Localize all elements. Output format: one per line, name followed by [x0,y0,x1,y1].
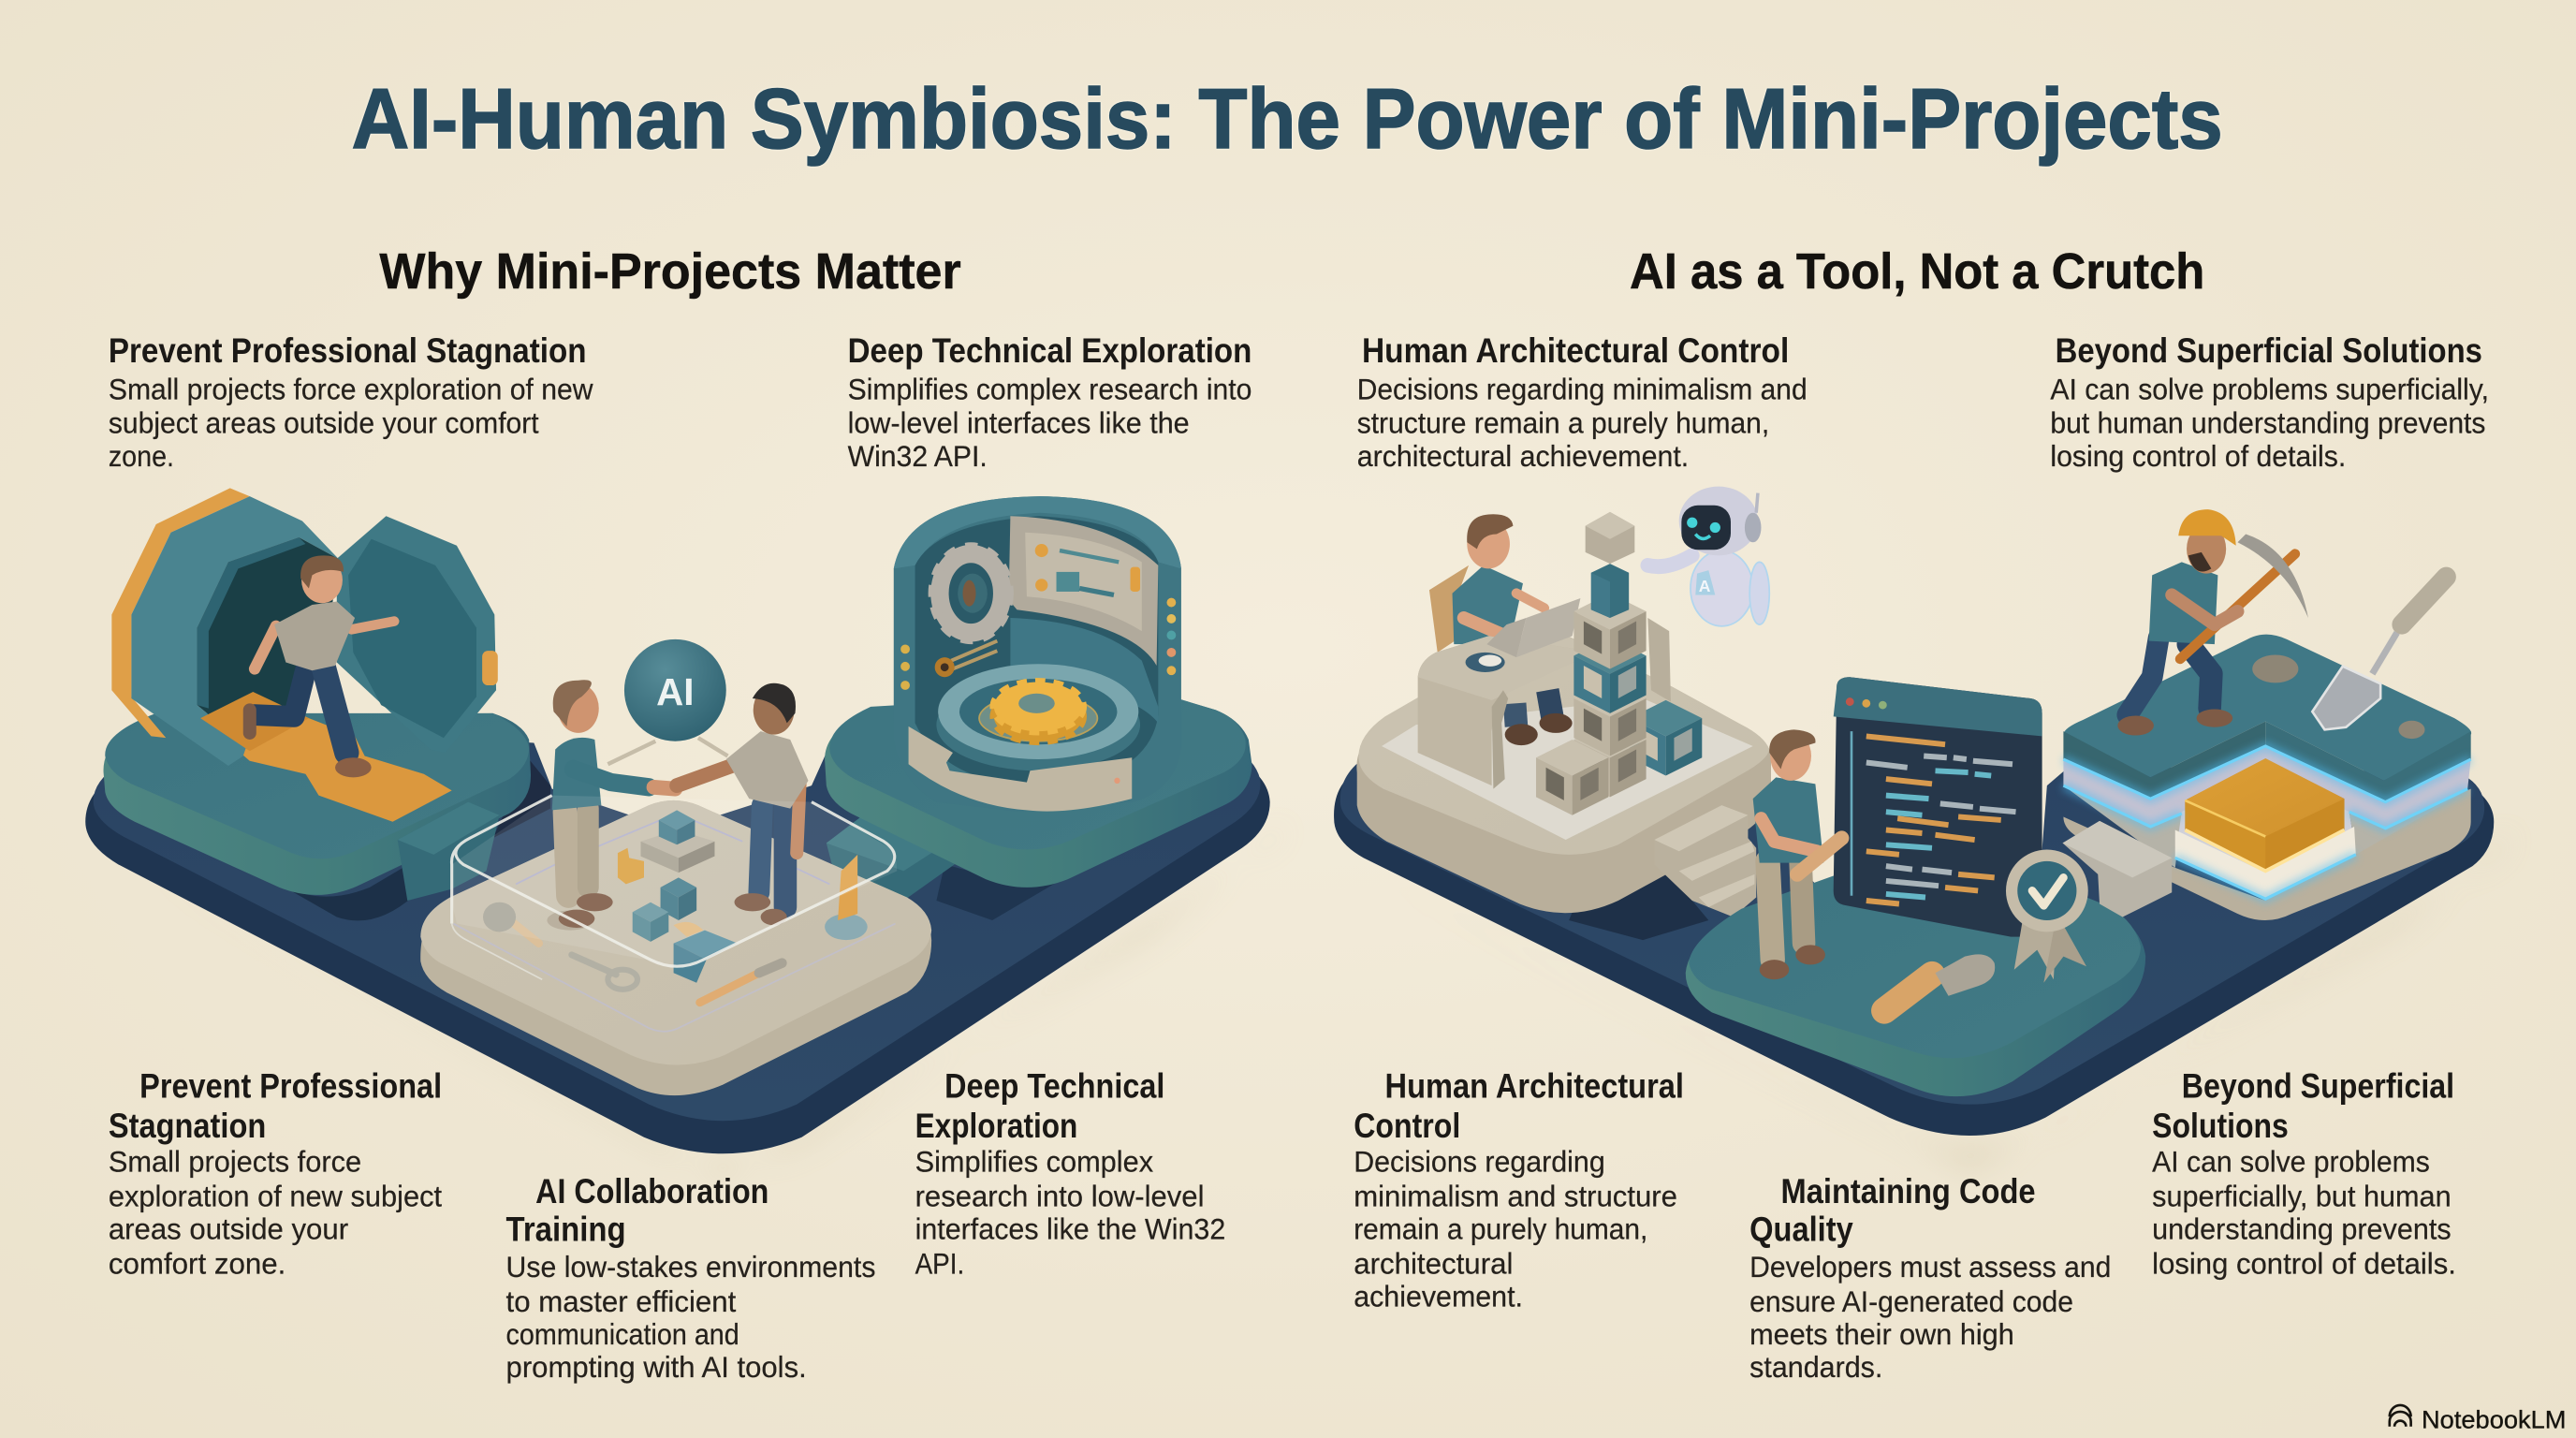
text block: deep technical exploration top: Deep Technical Exploration [848,331,1251,370]
text block: deep technical exploration top: low-level interfaces like the [848,406,1190,439]
text block: prevent professional stagnation bottom: Prevent Professional [139,1067,442,1106]
panel: beige workshop platform [420,800,931,1095]
text block: prevent professional stagnation top: Small projects force exploration of new [109,374,593,406]
text block: deep technical exploration bottom: interfaces like the Win32 [915,1213,1225,1246]
icon: ai robot: A [1699,577,1711,595]
figure: right person shaking hands [677,683,809,925]
text block: prevent professional stagnation bottom [109,1067,442,1280]
stone step [2063,821,2172,917]
text block: beyond superficial solutions top: Beyond Superficial Solutions [2056,331,2482,370]
text block: ai collaboration training [506,1172,875,1384]
navy base [1334,716,2494,1136]
text block: beyond superficial solutions top: losing control of details. [2050,440,2346,473]
title: AI-Human Symbiosis: The Power of Mini-Projects [352,71,2223,167]
figure: ai sphere [607,639,728,764]
teal block: left [104,713,531,895]
text block: ai collaboration training: Use low-stakes environments [506,1251,875,1284]
icon: desk with person [1418,514,1671,789]
text block: prevent professional stagnation bottom: Stagnation [109,1107,266,1145]
text block: maintaining code quality: meets their own high [1749,1318,2014,1351]
platform shadow [131,822,1290,1177]
navy base [85,720,1270,1153]
text block: prevent professional stagnation bottom: exploration of new subject [109,1180,442,1212]
text block: prevent professional stagnation bottom: areas outside your [109,1213,348,1246]
text block: maintaining code quality: Developers must assess and [1749,1251,2111,1284]
text block: prevent professional stagnation top [109,331,593,473]
text block: beyond superficial solutions top [2050,331,2489,473]
teal block: right [825,690,1251,888]
text block: ai collaboration training: to master efficient [506,1285,737,1318]
text block: human architectural control bottom: remain a purely human, [1354,1213,1647,1246]
text block: prevent professional stagnation top: Prevent Professional Stagnation [109,331,587,370]
text block: human architectural control top: structure remain a purely human, [1357,406,1769,439]
figure: developer [1753,729,1841,979]
stone block: left [1356,624,1771,913]
heading: ai as a tool: AI as a Tool, Not a Crutch [1630,244,2204,300]
text block: ai collaboration training: AI Collaboration [535,1172,768,1211]
text block: maintaining code quality: Quality [1749,1210,1853,1248]
figure: person walking through door [250,555,394,777]
platform shadow [1347,829,2513,1170]
text block: deep technical exploration bottom: Deep Technical [944,1067,1164,1106]
icon: block tower [1536,512,1702,815]
icon: technical chamber [894,496,1181,812]
text block: prevent professional stagnation bottom: comfort zone. [109,1247,285,1280]
icon: stone stairs [1654,805,1756,917]
text block: prevent professional stagnation top: subject areas outside your comfort [109,406,539,439]
text block: deep technical exploration top: Win32 API. [848,440,988,473]
text block: human architectural control bottom: Control [1354,1107,1460,1145]
chart: code screen [1834,677,2042,937]
panel: left isometric platform [85,488,1290,1177]
text block: prevent professional stagnation bottom: Small projects force [109,1146,361,1179]
text block: deep technical exploration bottom: Simplifies complex [915,1146,1153,1179]
text block: beyond superficial solutions bottom: losing control of details. [2152,1247,2456,1280]
text block: human architectural control bottom: architectural [1354,1247,1513,1280]
text block: maintaining code quality: standards. [1749,1351,1882,1384]
figure: miner with pickaxe [2117,509,2308,736]
teal connector left [398,802,500,901]
text block: deep technical exploration bottom: research into low-level [915,1180,1204,1212]
icon: workshop tools [483,810,868,1003]
text block: beyond superficial solutions bottom: Beyond Superficial [2182,1067,2454,1106]
teal block: centre [1686,838,2145,1096]
teal connector right [827,802,955,901]
text block: beyond superficial solutions bottom: AI can solve problems [2152,1146,2430,1179]
panel: right isometric platform [1334,487,2513,1170]
text block: deep technical exploration bottom: Exploration [915,1107,1077,1145]
icon: shovel [2312,577,2446,729]
icon: chisel [1884,954,1995,1011]
text block: beyond superficial solutions top: but human understanding prevents [2050,406,2485,439]
text block: beyond superficial solutions bottom: superficially, but human [2152,1180,2452,1212]
text block: human architectural control top: architectural achievement. [1357,440,1689,473]
text block: ai collaboration training: Training [506,1210,626,1248]
text block: maintaining code quality: ensure AI-generated code [1749,1285,2073,1318]
icon: orange path [200,692,452,822]
text block: ai collaboration training: prompting with AI tools. [506,1351,807,1384]
text block: human architectural control top: Human Architectural Control [1362,331,1789,370]
text block: deep technical exploration bottom [915,1067,1225,1280]
text block: human architectural control top: Decisions regarding minimalism and [1357,374,1808,406]
figure: ai sphere: AI [656,670,695,713]
text block: deep technical exploration bottom: API. [915,1247,964,1280]
text block: beyond superficial solutions top: AI can solve problems superficially, [2050,374,2489,406]
text block: beyond superficial solutions bottom: understanding prevents [2152,1213,2452,1246]
text block: beyond superficial solutions bottom [2152,1067,2456,1280]
figure: left person shaking hands [547,680,675,931]
text block: beyond superficial solutions bottom: Solutions [2152,1107,2289,1145]
text block: ai collaboration training: communication and [506,1318,739,1351]
text block: deep technical exploration top [848,331,1251,473]
heading: why mini-projects matter: Why Mini-Projects Matter [379,244,961,300]
text block: maintaining code quality [1749,1172,2111,1384]
icon: ai robot [1647,487,1769,626]
logo: notebooklm: NotebookLM [2422,1404,2566,1433]
icon: quality badge [2006,850,2088,983]
text block: human architectural control bottom: achievement. [1354,1281,1523,1313]
text block: human architectural control bottom: minimalism and structure [1354,1180,1677,1212]
icon: octagonal door [111,488,498,766]
text block: human architectural control bottom: Decisions regarding [1354,1146,1605,1179]
text block: prevent professional stagnation top: zone. [109,440,174,473]
text block: human architectural control bottom [1354,1067,1684,1313]
text block: human architectural control top [1357,331,1808,473]
glass case [450,796,897,979]
text block: deep technical exploration top: Simplifies complex research into [848,374,1251,406]
text block: maintaining code quality: Maintaining Code [1781,1172,2036,1211]
text block: human architectural control bottom: Human Architectural [1385,1067,1684,1106]
icon: layered excavation block [2063,635,2471,920]
